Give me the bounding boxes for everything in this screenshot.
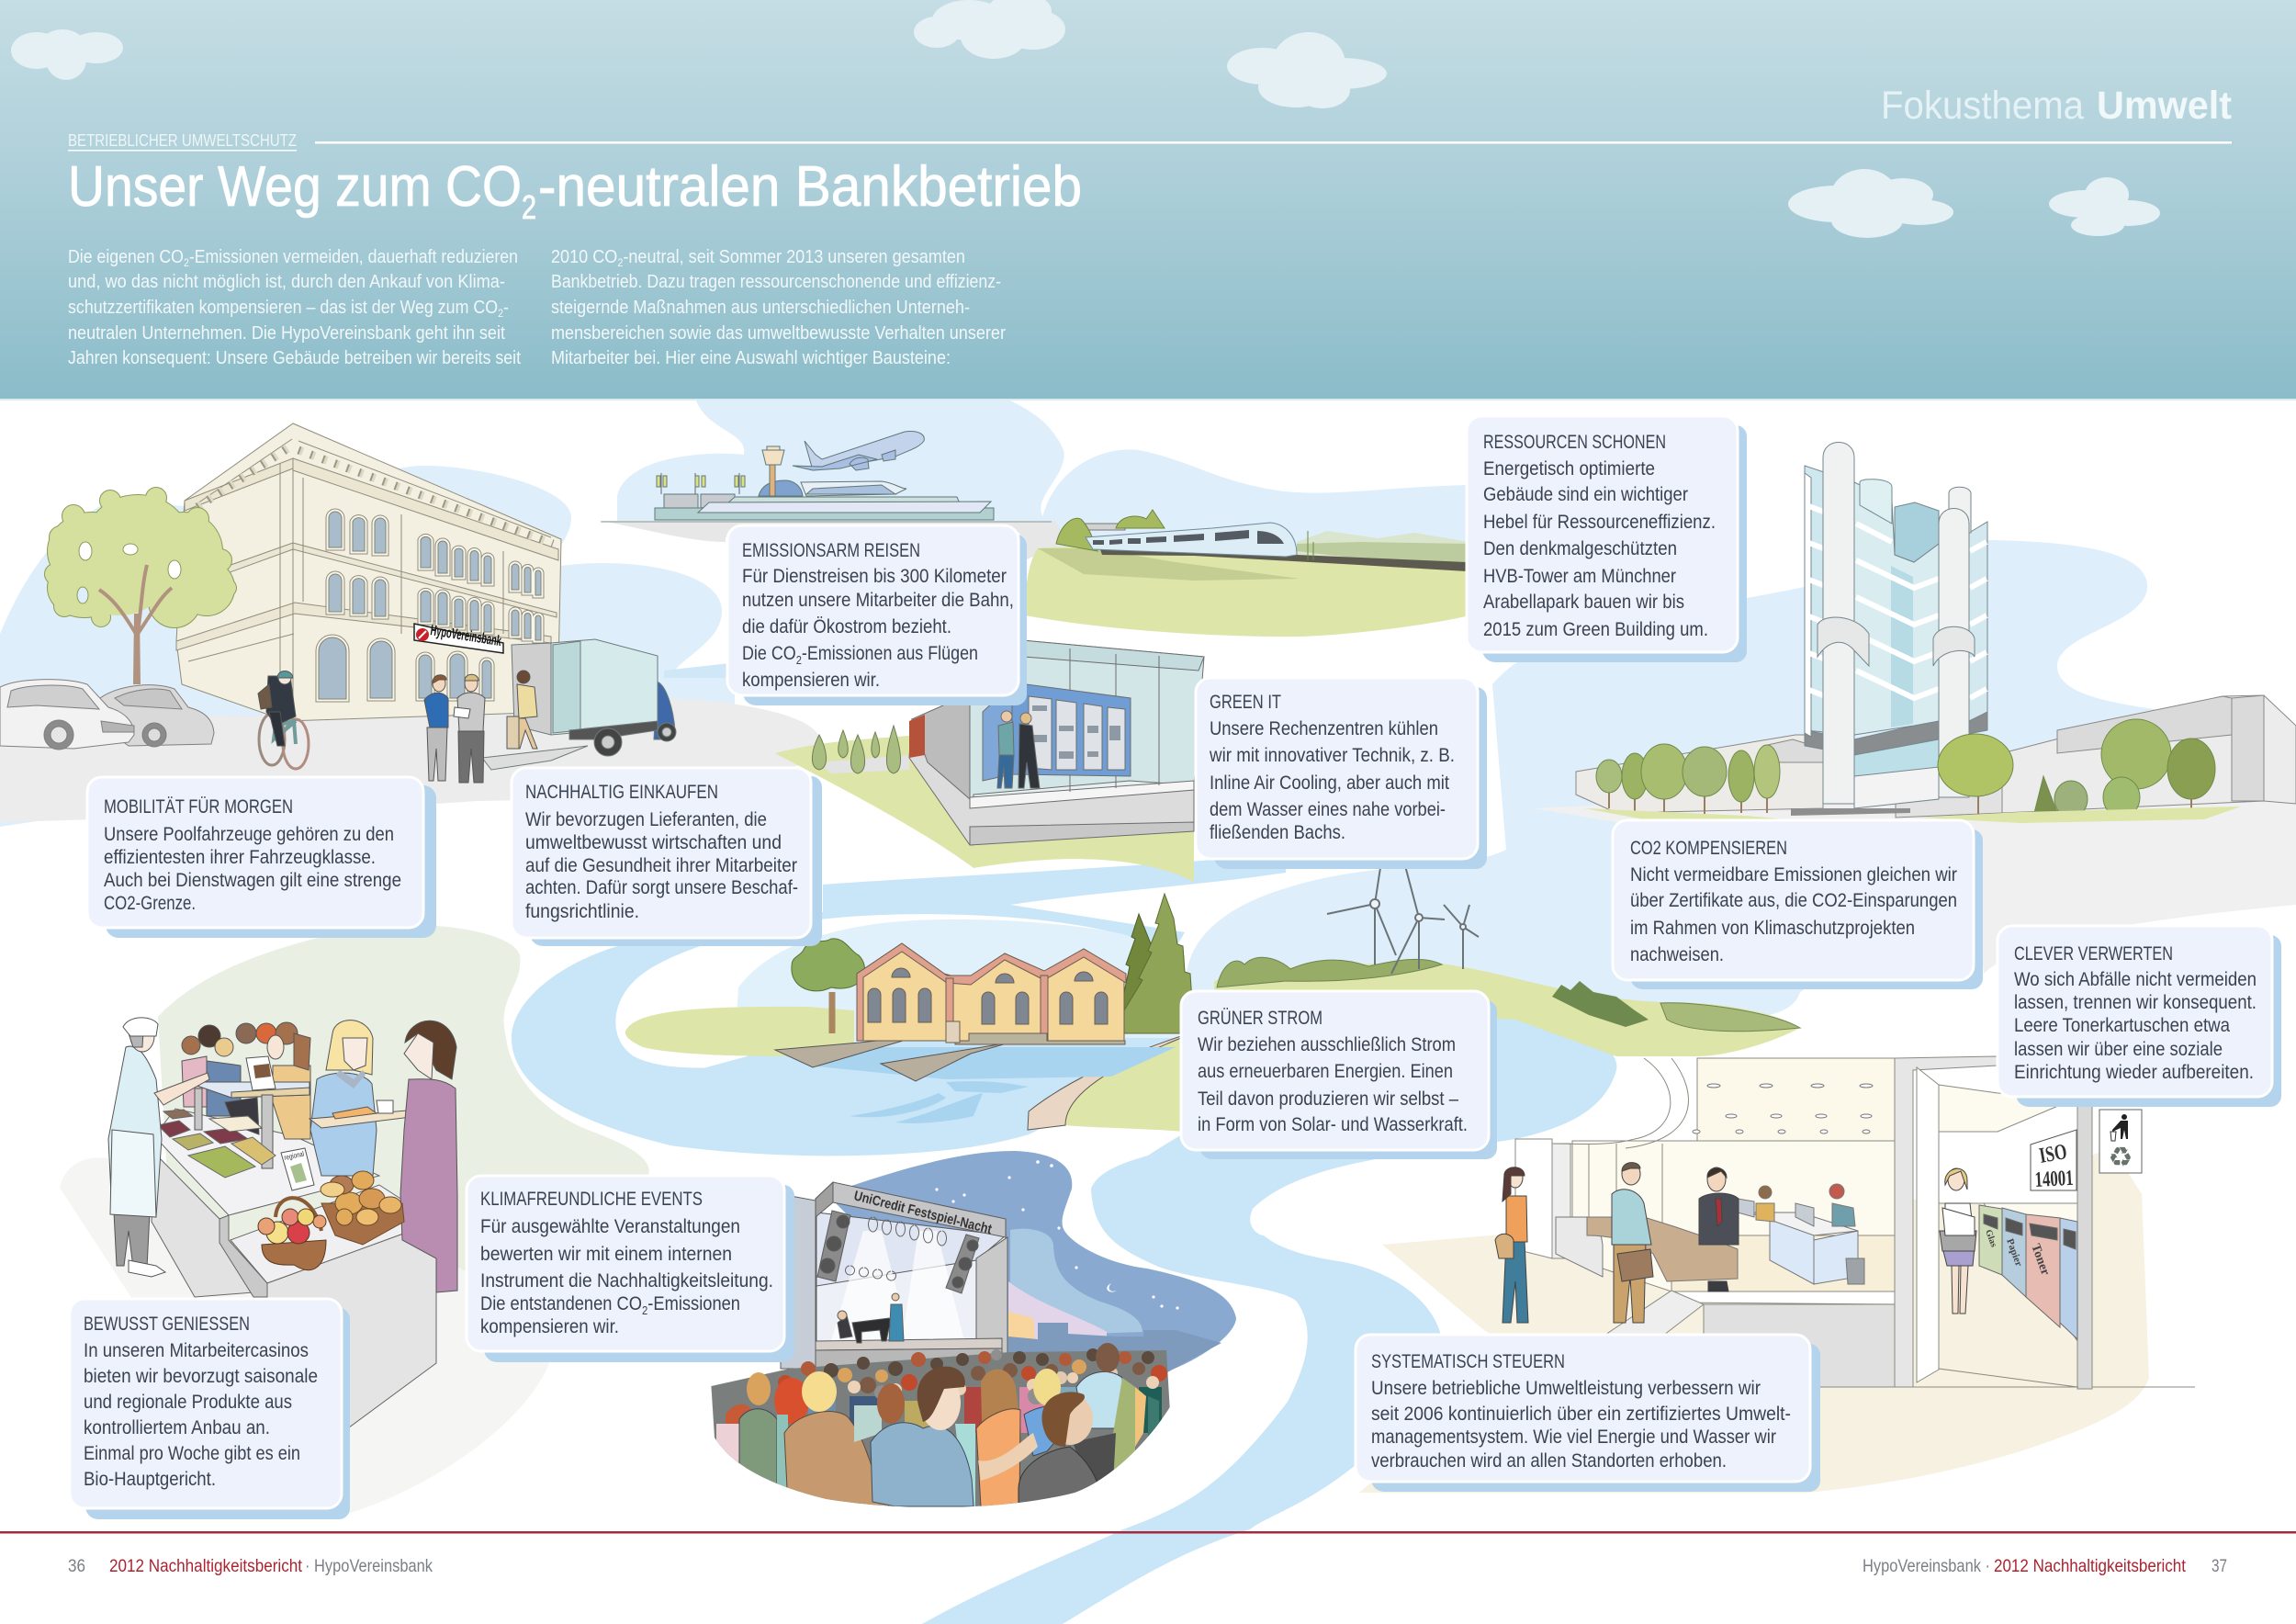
woman with tray: [310, 1021, 419, 1176]
card: CO2 kompensieren: im Rahmen von Klimaschutzprojekten: [1630, 918, 1915, 939]
illustration: airport: [601, 432, 1052, 522]
intro column right: 2: [617, 256, 624, 269]
illustration: staff canteen: regional: [284, 1150, 305, 1162]
illustration: open-air concert: [707, 1151, 1236, 1506]
card: Green IT: Inline Air Cooling, aber auch mit: [1210, 773, 1449, 794]
card: CO2 kompensieren: über Zertifikate aus, die CO2-Einsparungen: [1630, 890, 1957, 911]
card: Klimafreundliche Events: [467, 1176, 794, 1362]
parked cars: [0, 680, 214, 750]
card: CO2 kompensieren: CO2 KOMPENSIEREN: [1630, 838, 1787, 859]
water details: [808, 1047, 1176, 1123]
quays: [775, 1036, 1010, 1081]
card: Mobilität für Morgen: effizientesten ihrer Fahrzeugklasse.: [104, 847, 376, 868]
intro column left: neutralen Unternehmen. Die HypoVereinsbank geht ihn seit: [68, 323, 505, 344]
building: [176, 423, 561, 721]
card: Emissionsarm reisen: die dafür Ökostrom bezieht.: [742, 616, 951, 637]
footer left: 36: [68, 1557, 85, 1576]
card: Nachhaltig einkaufen: umweltbewusst wirtschaften und: [525, 832, 782, 853]
footer right: [1863, 1557, 2227, 1576]
bread basket: [321, 1171, 404, 1245]
card: Ressourcen schonen: Arabellapark bauen wir bis: [1483, 592, 1684, 613]
card: CO2 kompensieren: Nicht vermeidbare Emissionen gleichen wir: [1630, 864, 1957, 885]
footer left: [68, 1557, 433, 1576]
green plot: [775, 735, 1194, 882]
card: Clever verwerten: [1998, 926, 2281, 1107]
sign: [414, 623, 503, 653]
blob behind bank: [0, 466, 735, 827]
ceiling lights: [1693, 1084, 1873, 1133]
intro column left: 2: [184, 256, 189, 269]
card: Bewusst genießen: In unseren Mitarbeitercasinos: [84, 1340, 309, 1361]
main river band: [922, 1010, 1616, 1624]
facade wings: [1805, 466, 1854, 735]
card: Systematisch steuern: managementsystem. Wie viel Energie und Wasser wir: [1371, 1427, 1776, 1448]
card: Klimafreundliche Events: 2: [642, 1303, 647, 1317]
card: Bewusst genießen: bieten wir bevorzugt saisonale: [84, 1366, 318, 1387]
card: Emissionsarm reisen: Die CO: [742, 643, 805, 664]
card: Grüner Strom: GRÜNER STROM: [1198, 1008, 1322, 1029]
grey ground tower: [1534, 772, 2296, 974]
footer left: 2012 Nachhaltigkeitsbericht: [109, 1557, 303, 1576]
river outer band: [512, 854, 1286, 1156]
illustration: bank building, street and delivery: [0, 423, 676, 783]
dusk light: [1010, 1229, 1142, 1336]
background landscape shapes: [0, 399, 2296, 1624]
card: Nachhaltig einkaufen: auf die Gesundheit ihrer Mitarbeiter: [525, 855, 797, 876]
people behind counter: [182, 1022, 310, 1139]
card: Bewusst genießen: Einmal pro Woche gibt es ein: [84, 1443, 300, 1464]
cylinders: [1949, 487, 1971, 533]
card: Systematisch steuern: SYSTEMATISCH STEUERN: [1371, 1351, 1565, 1372]
island: [625, 1007, 854, 1056]
card: Mobilität für Morgen: Unsere Poolfahrzeuge gehören zu den: [104, 824, 394, 845]
card: Nachhaltig einkaufen: achten. Dafür sorgt unsere Beschaf-: [525, 877, 798, 898]
illustration: hydro power station: [625, 850, 1800, 1132]
brand kicker: [1881, 84, 2232, 128]
intro column right: Mitarbeiter bei. Hier eine Auswahl wichtiger Bausteine:: [551, 348, 951, 368]
grey ground bank: [0, 698, 821, 822]
lake water: [680, 1038, 1185, 1154]
card: Klimafreundliche Events: -Emissionen: [647, 1293, 740, 1314]
man with briefcase: [1612, 1163, 1653, 1323]
banner text: UniCredit Festspiel-Nacht: [852, 1188, 994, 1237]
card: Emissionsarm reisen: kompensieren wir.: [742, 670, 880, 691]
section label: BETRIEBLICHER UMWELTSCHUTZ: [68, 131, 297, 150]
illustration: staff canteen: [108, 1018, 457, 1433]
card: CO2 kompensieren: [1613, 820, 1983, 989]
footer right: HypoVereinsbank ·: [1863, 1557, 1990, 1576]
card: Ressourcen schonen: RESSOURCEN SCHONEN: [1483, 432, 1666, 453]
wind park hill: [1214, 957, 1800, 1056]
grey ground airport: [601, 521, 1065, 560]
sign: HypoVereinsbank: [429, 623, 502, 649]
woman with paper: [1940, 1168, 1976, 1314]
card: Clever verwerten: Leere Tonerkartuschen etwa: [2014, 1015, 2230, 1036]
title: [68, 155, 1082, 226]
card: Clever verwerten: lassen, trennen wir konsequent.: [2014, 992, 2257, 1013]
card: Ressourcen schonen: Hebel für Ressourceneffizienz.: [1483, 512, 1716, 533]
card: Green IT: Unsere Rechenzentren kühlen: [1210, 718, 1438, 739]
intro column right: Bankbetrieb. Dazu tragen ressourcenschonende und effizienz-: [551, 272, 1001, 292]
card: Emissionsarm reisen: -Emissionen aus Flügen: [802, 643, 978, 664]
card: Ressourcen schonen: HVB-Tower am Münchner: [1483, 566, 1676, 587]
cafeteria lower blob: [60, 1157, 556, 1514]
intro column left: -Emissionen vermeiden, dauerhaft reduzieren: [189, 247, 518, 267]
card: Green IT: GREEN IT: [1210, 692, 1281, 713]
footer right: 2012 Nachhaltigkeitsbericht: [1994, 1557, 2187, 1576]
intro column right: steigernde Maßnahmen aus unterschiedlichen Unterneh-: [551, 298, 970, 318]
lower counter: [152, 1109, 436, 1433]
intro column right: -neutral, seit Sommer 2013 unseren gesamten: [623, 247, 965, 267]
card: Klimafreundliche Events: Instrument die Nachhaltigkeitsleitung.: [480, 1270, 773, 1291]
card: Mobilität für Morgen: Auch bei Dienstwagen gilt eine strenge: [104, 870, 401, 891]
title: Unser Weg zum CO: [68, 155, 522, 219]
illustration: office and recycling: Glas: [1983, 1228, 1998, 1248]
title: -neutralen Bankbetrieb: [538, 155, 1082, 219]
card: Systematisch steuern: [1356, 1335, 1820, 1492]
stage: [781, 1182, 1007, 1369]
card: Ressourcen schonen: 2015 zum Green Building um.: [1483, 619, 1708, 640]
intro column left: -: [503, 298, 509, 318]
card: Clever verwerten: CLEVER VERWERTEN: [2014, 943, 2173, 964]
card: CO2 kompensieren: nachweisen.: [1630, 944, 1724, 965]
suit man: [1699, 1167, 1739, 1291]
illustration: office and recycling: Toner: [2028, 1242, 2052, 1278]
tower core: [1805, 443, 1987, 808]
card: Bewusst genießen: und regionale Produkte aus: [84, 1392, 292, 1413]
intro column right: 2010 CO: [551, 247, 625, 267]
trees: [1596, 719, 2215, 818]
intro column left: und, wo das nicht möglich ist, durch den Ankauf von Klima-: [68, 272, 505, 292]
footer left: · HypoVereinsbank: [305, 1557, 433, 1576]
fruit basket: [258, 1198, 326, 1270]
fir trees: [1122, 914, 1166, 1033]
card: Bewusst genießen: [70, 1299, 350, 1519]
card: Mobilität für Morgen: [87, 777, 436, 938]
card: Bewusst genießen: BEWUSST GENIESSEN: [84, 1314, 250, 1335]
building: [909, 640, 1204, 845]
wedge by truck: [664, 663, 730, 678]
food trays: [158, 1110, 276, 1178]
card: Mobilität für Morgen: MOBILITÄT FÜR MORGEN: [104, 796, 293, 818]
recycling sign: [2099, 1110, 2142, 1174]
recycling sign: ♻: [2109, 1142, 2133, 1174]
river white stripe: [615, 914, 1130, 1067]
card: Green IT: [1196, 678, 1487, 869]
ISO sign: 14001: [2034, 1167, 2074, 1192]
right bank: [1065, 1038, 1185, 1132]
card: Grüner Strom: aus erneuerbaren Energien. Einen: [1198, 1061, 1453, 1082]
card: Emissionsarm reisen: [727, 525, 1027, 705]
intro column left: 2: [498, 307, 503, 320]
woman in purple: [400, 1021, 457, 1292]
rooms: [1515, 1056, 2195, 1389]
large pale blob behind tower and wind park: [1186, 540, 2272, 1029]
card: Systematisch steuern: seit 2006 kontinuierlich über ein zertifiziertes Umwelt-: [1371, 1404, 1791, 1425]
ISO sign: ISO: [2038, 1140, 2069, 1168]
stars and moon: [935, 1160, 1179, 1310]
card: Systematisch steuern: Unsere betriebliche Umweltleistung verbessern wir: [1371, 1378, 1761, 1399]
card: Klimafreundliche Events: bewerten wir mit einem internen: [480, 1244, 732, 1265]
card: Grüner Strom: Teil davon produzieren wir selbst –: [1198, 1088, 1458, 1110]
ISO sign: [2031, 1130, 2077, 1192]
card: Green IT: wir mit innovativer Technik, z. B.: [1209, 745, 1455, 766]
card: Nachhaltig einkaufen: Wir bevorzugen Lieferanten, die: [525, 809, 767, 830]
footer right: 37: [2212, 1557, 2227, 1576]
intro column left: Jahren konsequent: Unsere Gebäude betreiben wir bereits seit: [68, 348, 521, 368]
card: Bewusst genießen: kontrolliertem Anbau an.: [84, 1417, 270, 1438]
card: Klimafreundliche Events: kompensieren wir.: [480, 1316, 619, 1337]
people at truck: [424, 671, 537, 783]
chef: [108, 1018, 209, 1277]
reception desk: [1556, 1184, 1864, 1284]
wind turbines: [1327, 850, 1479, 974]
intro column left: [68, 247, 521, 368]
card: Green IT: fließenden Bachs.: [1210, 822, 1345, 843]
card: Clever verwerten: lassen wir über eine soziale: [2014, 1039, 2223, 1060]
windows: [319, 512, 541, 699]
card: Ressourcen schonen: Den denkmalgeschützten: [1483, 538, 1677, 559]
brand kicker: Fokusthema: [1881, 84, 2084, 128]
card: Mobilität für Morgen: CO2-Grenze.: [104, 893, 196, 914]
card: Clever verwerten: Einrichtung wieder aufbereiten.: [2014, 1062, 2254, 1083]
clouds: [11, 0, 2160, 238]
recycling bins: [1979, 1205, 2077, 1339]
card: Grüner Strom: [1181, 991, 1497, 1159]
low buildings: [1576, 695, 2296, 818]
header band: [0, 0, 2296, 400]
intro column left: schutzzertifikaten kompensieren – das ist der Weg zum CO: [68, 298, 550, 318]
card: Ressourcen schonen: Energetisch optimierte: [1483, 458, 1655, 479]
intro column right: [551, 247, 1006, 368]
power station: [857, 943, 1126, 1044]
intro column right: mensbereichen sowie das umweltbewusste Verhalten unserer: [551, 323, 1006, 344]
delivery truck: [482, 639, 676, 770]
illustration: HVB tower: [1576, 443, 2296, 823]
illustration: office and recycling: Papier: [2004, 1237, 2024, 1268]
card: Grüner Strom: Wir beziehen ausschließlich Strom: [1198, 1034, 1456, 1055]
card: Clever verwerten: Wo sich Abfälle nicht vermeiden: [2014, 969, 2257, 990]
card: Ressourcen schonen: Gebäude sind ein wichtiger: [1483, 484, 1688, 505]
card: Bewusst genießen: Bio-Hauptgericht.: [84, 1469, 216, 1490]
footer: [0, 1531, 2296, 1576]
inner pale lake: [735, 919, 1185, 1043]
cafeteria background blob: [158, 925, 649, 1304]
card: Emissionsarm reisen: Für Dienstreisen bis 300 Kilometer: [742, 566, 1007, 587]
brand kicker: Umwelt: [2097, 84, 2232, 128]
illustration: train in landscape: [1025, 510, 1469, 637]
card: Emissionsarm reisen: 2: [796, 653, 802, 667]
green hill: [1025, 547, 1469, 637]
intro column left: Die eigenen CO: [68, 247, 198, 267]
card: Klimafreundliche Events: KLIMAFREUNDLICHE EVENTS: [480, 1189, 703, 1210]
card: Klimafreundliche Events: Die entstandenen CO: [480, 1293, 666, 1314]
card: Ressourcen schonen: [1467, 416, 1747, 662]
cyclist: [258, 671, 309, 769]
card: Nachhaltig einkaufen: NACHHALTIG EINKAUFEN: [525, 782, 718, 803]
card: Emissionsarm reisen: nutzen unsere Mitarbeiter die Bahn,: [742, 590, 1014, 611]
card: Systematisch steuern: verbrauchen wird an allen Standorten erhoben.: [1371, 1450, 1727, 1472]
train: [1086, 523, 1297, 557]
card: Nachhaltig einkaufen: [512, 768, 822, 946]
woman with handbag: [1495, 1167, 1528, 1323]
blob behind airport: [617, 399, 1064, 524]
crowd: [707, 1343, 1176, 1506]
card: Emissionsarm reisen: EMISSIONSARM REISEN: [742, 540, 920, 561]
blob behind train: [1043, 449, 1469, 588]
guard and signs: [186, 1056, 314, 1190]
tree: [45, 488, 236, 684]
illustration: data centre: [775, 640, 1204, 882]
night sky: [827, 1151, 1236, 1378]
card: Grüner Strom: in Form von Solar- und Wasserkraft.: [1198, 1114, 1468, 1135]
card: Green IT: dem Wasser eines nahe vorbei-: [1210, 799, 1446, 820]
round tree: [828, 992, 836, 1033]
card: Klimafreundliche Events: Für ausgewählte Veranstaltungen: [480, 1216, 740, 1237]
illustration: office and recycling: [1495, 1056, 2195, 1389]
office floor shape: [1359, 1148, 2149, 1493]
card: Nachhaltig einkaufen: fungsrichtlinie.: [525, 901, 639, 922]
title: 2: [522, 188, 536, 226]
